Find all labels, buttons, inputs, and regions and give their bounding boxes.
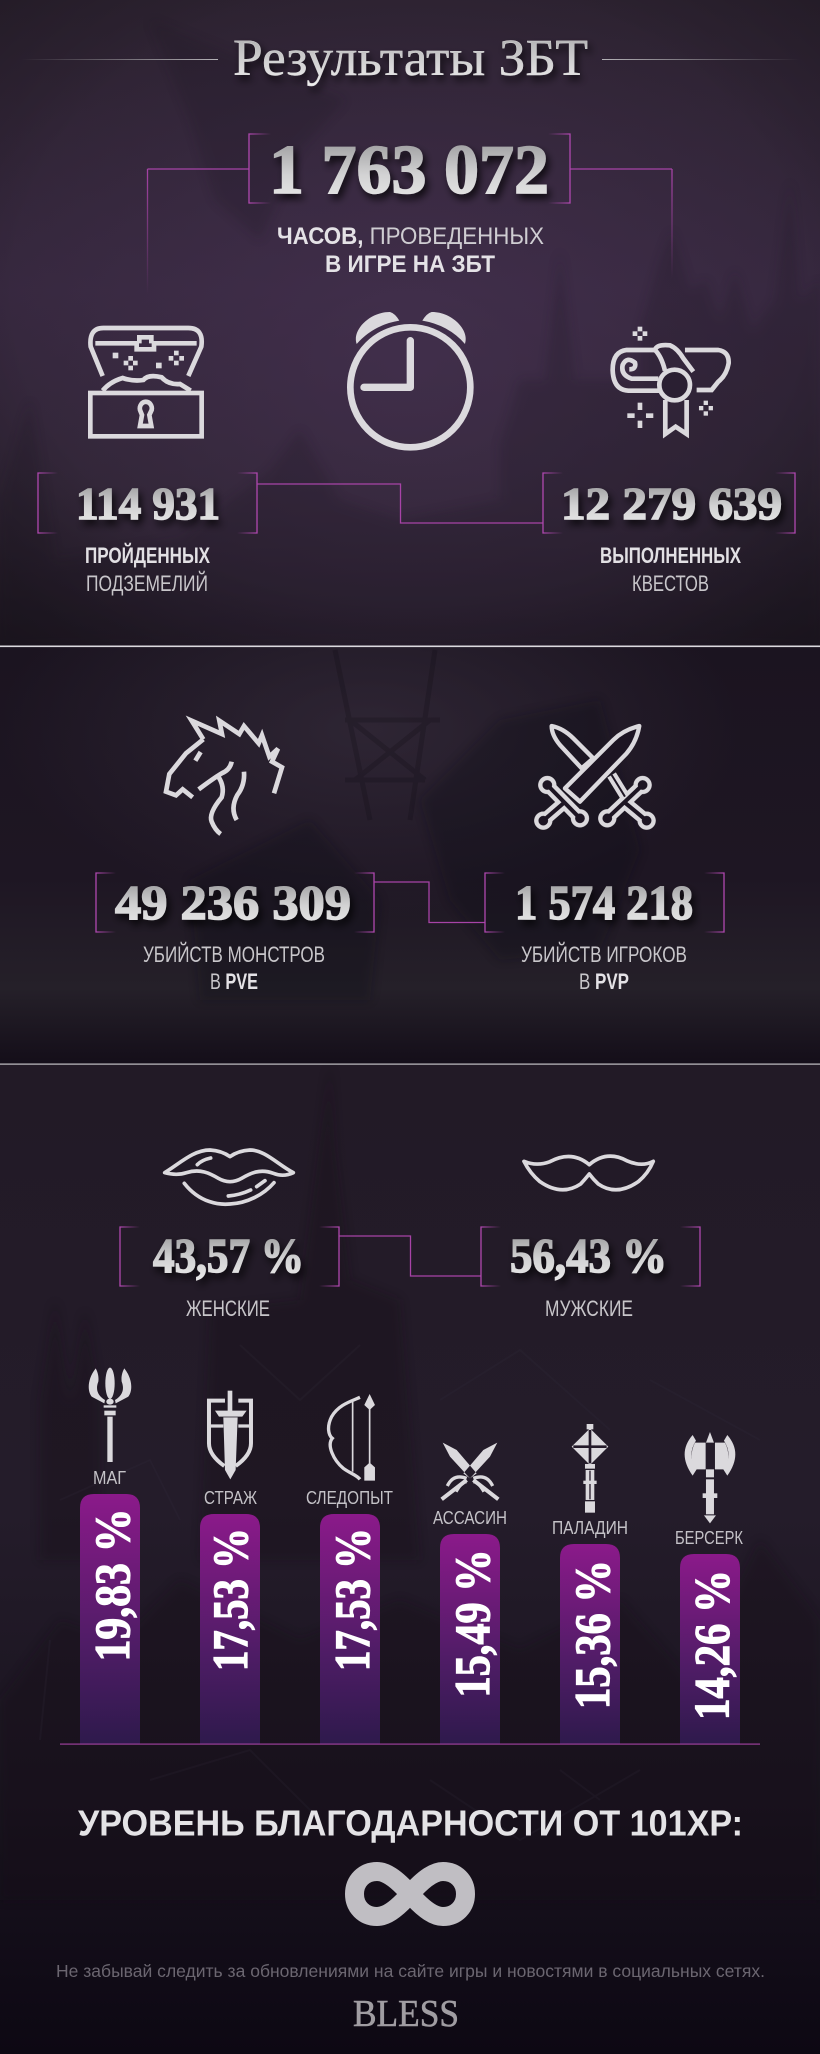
bar: paladin (560, 1544, 620, 1744)
icon: berserker axe (685, 1432, 735, 1523)
bar: guardian (200, 1514, 260, 1744)
section divider lines (0, 646, 820, 1065)
stat: quests (543, 473, 795, 596)
number: 1 574 218 (515, 875, 693, 930)
icon: mage trident (89, 1368, 131, 1462)
caption: МУЖСКИЕ (545, 1296, 633, 1321)
number: 56,43 % (510, 1228, 667, 1283)
back sword (552, 726, 656, 830)
caption: КВЕСТОВ (632, 571, 709, 596)
bar: mage (80, 1494, 140, 1744)
background: section 1 (0, 0, 820, 646)
bracket box (38, 473, 257, 533)
caption (521, 942, 687, 994)
icon: ranger bow (329, 1394, 375, 1481)
value: 15,36 % (564, 1560, 620, 1709)
connector lines from hours box (148, 169, 672, 294)
caption: В PVE (210, 969, 258, 994)
caption (143, 942, 325, 994)
icon: paladin mace (572, 1424, 608, 1513)
caption: В ИГРЕ НА ЗБТ (325, 251, 495, 278)
connector: pve to pvp (374, 882, 485, 922)
value: 19,83 % (84, 1508, 140, 1662)
caption: ПОДЗЕМЕЛИЙ (86, 571, 208, 596)
number: 1 763 072 (269, 132, 549, 209)
bar: ranger (320, 1514, 380, 1744)
caption (600, 543, 741, 596)
bracket box (249, 134, 570, 203)
bar: assassin (440, 1534, 500, 1744)
value: 14,26 % (684, 1570, 740, 1720)
icon: treasure chest (90, 328, 202, 436)
number: 43,57 % (153, 1228, 304, 1283)
class label: mage: МАГ (93, 1468, 126, 1488)
class label: assassin: АССАСИН (433, 1508, 507, 1528)
bracket box (120, 1227, 339, 1286)
front sword (534, 726, 639, 830)
caption (85, 543, 210, 596)
bar: berserker (680, 1554, 740, 1744)
chart baseline (60, 1744, 760, 1745)
heading: gratitude level: УРОВЕНЬ БЛАГОДАРНОСТИ ОТ 101ХР: (78, 1802, 743, 1844)
class bar chart (60, 1368, 760, 1745)
caption: УБИЙСТВ МОНСТРОВ (143, 942, 325, 967)
number: 114 931 (76, 478, 220, 529)
class label: guardian: СТРАЖ (204, 1488, 257, 1508)
value: 17,53 % (202, 1528, 258, 1671)
value: 15,49 % (444, 1550, 500, 1698)
connector: dungeons to quests (257, 484, 543, 523)
icon: guardian shield sword (209, 1391, 251, 1479)
stat: dungeons (38, 473, 257, 596)
class label: ranger: СЛЕДОПЫТ (306, 1488, 393, 1508)
caption: ВЫПОЛНЕННЫХ (600, 543, 741, 568)
class label: berserker: БЕРСЕРК (675, 1528, 743, 1548)
icon: crossed swords (534, 726, 656, 830)
stat: hours in game (148, 132, 672, 294)
background: section 3 (0, 1064, 820, 2054)
stat: female share (120, 1227, 339, 1321)
bracket box (543, 473, 795, 533)
icon: horse monster (166, 721, 282, 834)
caption: В PVP (579, 969, 629, 994)
connector: female to male (339, 1236, 481, 1276)
stat: pvp kills (485, 873, 724, 994)
number: 12 279 639 (561, 478, 782, 529)
caption: ЧАСОВ, ПРОВЕДЕННЫХ (277, 223, 544, 250)
stat: male share (481, 1227, 700, 1321)
caption (277, 223, 544, 278)
logo: Bless: BLESS (353, 1993, 459, 2035)
value: 17,53 % (324, 1528, 380, 1671)
bracket box (485, 873, 724, 932)
bracket box (481, 1227, 700, 1286)
icon: infinity (354, 1872, 466, 1916)
number: 49 236 309 (115, 875, 351, 930)
title text: Результаты ЗБТ (233, 30, 588, 87)
icon: assassin daggers (442, 1443, 498, 1499)
caption: ЖЕНСКИЕ (186, 1296, 270, 1321)
icon: lips (165, 1150, 293, 1204)
bracket box (96, 873, 374, 932)
icon: moustache (524, 1156, 653, 1190)
footer note: Не забывай следить за обновлениями на сайте игры и новостями в социальных сетях. (56, 1961, 765, 1981)
icon: alarm clock (350, 312, 470, 447)
caption: УБИЙСТВ ИГРОКОВ (521, 942, 687, 967)
class label: paladin: ПАЛАДИН (552, 1518, 628, 1538)
caption: ПРОЙДЕННЫХ (85, 543, 210, 568)
background: section 2 (0, 646, 820, 1064)
stat: pve kills (96, 873, 374, 994)
icon: diploma scroll (613, 327, 729, 434)
